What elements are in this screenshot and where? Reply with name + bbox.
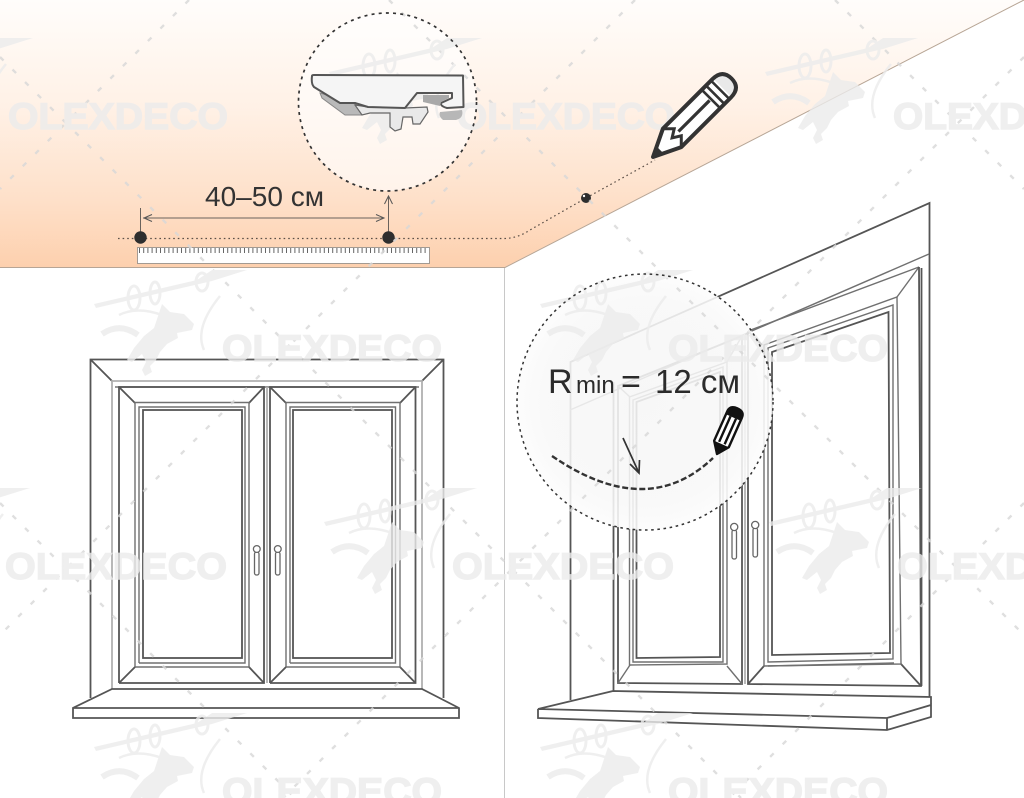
- watermark logo row 2: OLEXDECO: [222, 328, 442, 369]
- watermark logo row 4: [94, 713, 888, 798]
- label: Rmin = 12 cm: min: [576, 372, 615, 399]
- ceiling panel: [0, 0, 1024, 267]
- left window: [73, 360, 459, 718]
- pencil icon: small: [710, 405, 745, 457]
- mullion: [266, 387, 268, 683]
- window sill: [73, 689, 459, 718]
- window frame: [90, 360, 444, 698]
- watermark logo row 2: [94, 270, 888, 376]
- right window in perspective: [538, 203, 931, 730]
- dotted circle outline: clip detail: [298, 13, 476, 191]
- dotted marking line: [118, 160, 655, 238]
- magnifier circle: clip detail: [298, 13, 476, 191]
- watermark logo row 3: OLEXDECO: [452, 546, 674, 587]
- dashed minimum radius arc: [552, 456, 713, 489]
- window frame: [570, 203, 930, 700]
- label: Rmin = 12 cm: =: [621, 363, 641, 401]
- label: Rmin = 12 cm: R: [548, 363, 573, 401]
- magnifier circle: minimum radius: [517, 274, 773, 530]
- watermark logo row 1: [0, 38, 1024, 144]
- right sash: [270, 387, 416, 683]
- pencil icon: large: [644, 69, 741, 166]
- window sill: [538, 691, 931, 730]
- mullion: [744, 334, 746, 684]
- curtain clip profile: [312, 75, 464, 131]
- dimension: 40-50 cm: [140, 181, 392, 234]
- left sash: [119, 387, 264, 683]
- dotted circle outline: minimum radius: [517, 274, 773, 530]
- window handles: [253, 546, 281, 575]
- window handles: [731, 521, 759, 559]
- marking points: [134, 193, 591, 244]
- left sash: [618, 336, 742, 684]
- watermark logo row 2: OLEXDECO: [668, 328, 888, 369]
- arrow to radius arc: [623, 438, 640, 473]
- right sash: [748, 267, 921, 686]
- curtain rail measuring strip: [138, 248, 430, 264]
- label: Rmin = 12 cm: 12 см: [655, 363, 740, 400]
- dimension: 40-50 cm: 40–50 см: [205, 181, 324, 212]
- watermark logo row 1: OLEXDECO: [457, 96, 675, 137]
- watermark logo row 3: OLEXDECO: [5, 546, 227, 587]
- watermark logo row 3: [0, 488, 1024, 594]
- watermark logo row 1: OLEXDECO: [8, 96, 228, 137]
